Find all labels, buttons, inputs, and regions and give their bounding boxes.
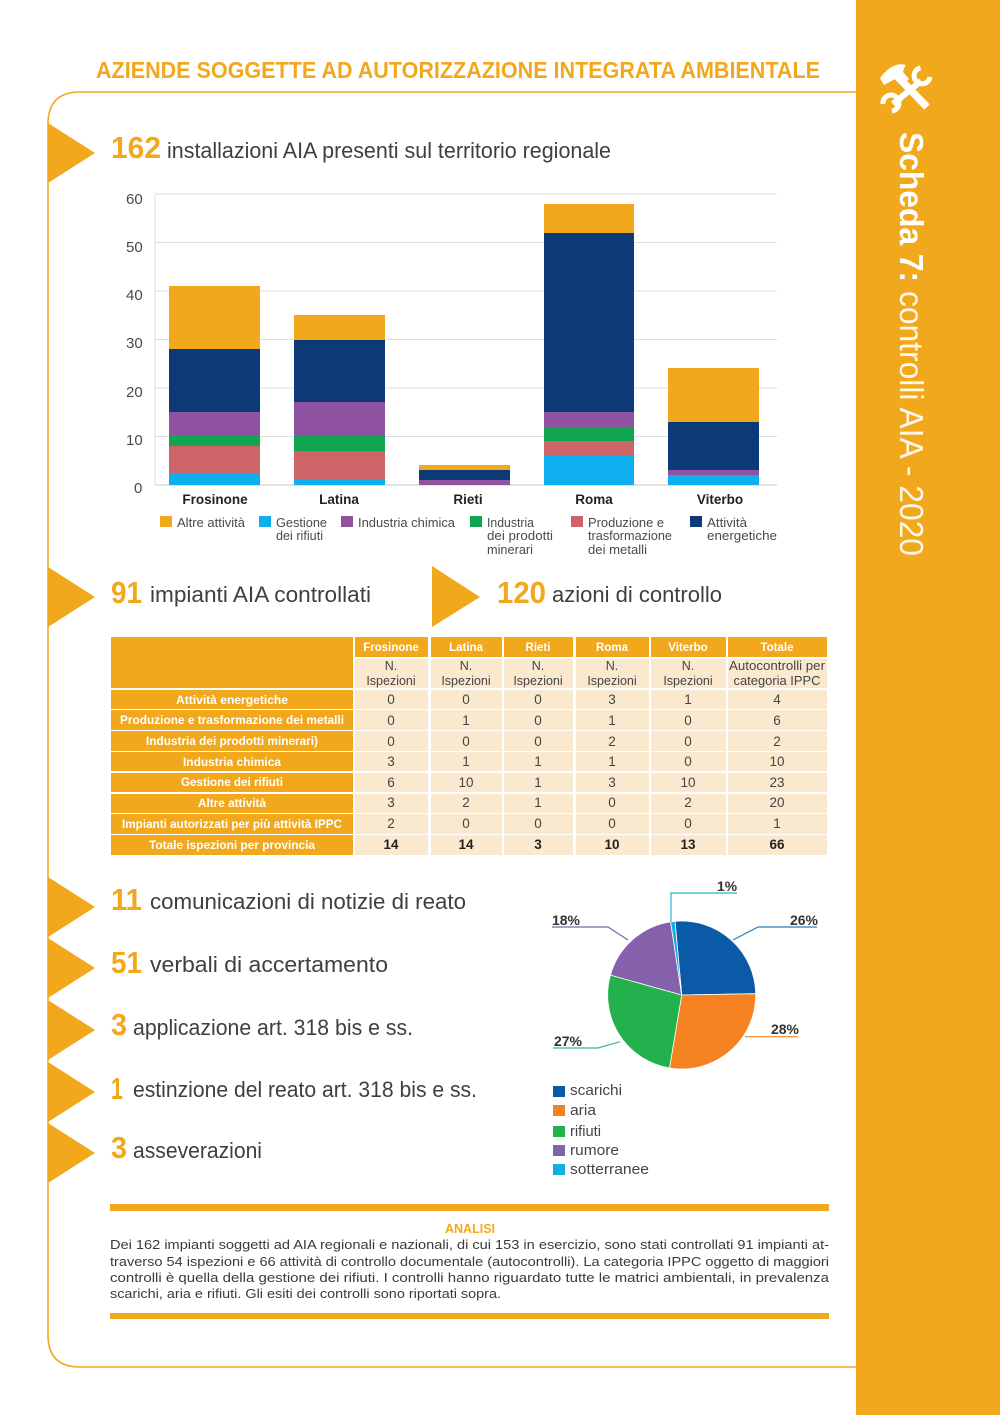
table header: N. — [606, 659, 618, 673]
stat: 1 estinzione — [48, 1062, 477, 1122]
table values: 10 — [458, 775, 474, 790]
stat: 162 installazioni: 162 — [111, 130, 161, 165]
table values: 0 — [534, 816, 542, 831]
stat: 11 comunicazioni: comunicazioni di notizie di reato — [150, 889, 466, 914]
table values: 6 — [387, 775, 395, 790]
table values: 0 — [534, 713, 542, 728]
table values: 0 — [684, 816, 692, 831]
stacked bar chart — [126, 191, 777, 507]
pie legend: rifiuti — [570, 1123, 601, 1140]
chart legend: trasformazione — [588, 529, 672, 543]
table values: 0 — [462, 734, 470, 749]
table values: 0 — [684, 754, 692, 769]
table row labels: Industria chimica — [183, 757, 282, 769]
bar: Roma — [544, 204, 634, 485]
table row labels: Attività energetiche — [176, 695, 288, 707]
chart legend: Gestione — [276, 516, 327, 530]
stat: 11 comunicazioni — [48, 877, 466, 937]
stat: 120 azioni: 120 — [497, 575, 546, 610]
table values: 0 — [684, 734, 692, 749]
stat: 51 verbali: 51 — [111, 945, 142, 980]
analysis text: traverso 54 ispezioni e 66 attività di controllo documentale (autocontrolli). La categoria IPPC oggetto di maggiori — [110, 1254, 829, 1269]
pie percentages: 26% — [790, 912, 819, 928]
table values: 0 — [534, 734, 542, 749]
stat: 1 estinzione: estinzione del reato art. 318 bis e ss. — [133, 1077, 477, 1102]
table row labels — [120, 695, 344, 852]
table header: categoria IPPC — [734, 674, 820, 688]
table values: 0 — [608, 816, 616, 831]
table header: Viterbo — [668, 642, 708, 654]
table values: 1 — [462, 754, 470, 769]
pie percentages: 1% — [717, 878, 738, 894]
pie percentages: 18% — [552, 912, 581, 928]
table header: Ispezioni — [587, 674, 637, 688]
table values: 3 — [387, 795, 395, 810]
table header: Latina — [449, 642, 484, 654]
pie percentages: 28% — [771, 1021, 800, 1037]
x axis labels: Viterbo — [697, 492, 743, 507]
inspections table — [111, 637, 827, 855]
table values: 4 — [773, 692, 781, 707]
table header: Ispezioni — [441, 674, 491, 688]
bar: Viterbo — [668, 368, 759, 485]
table values: 10 — [680, 775, 696, 790]
analysis text: scarichi, aria e rifiuti. Gli esiti dei controlli sono riportati sopra. — [110, 1286, 501, 1301]
y axis labels: 0 — [134, 480, 142, 497]
table header: Rieti — [526, 642, 550, 654]
pie percentages: 27% — [554, 1033, 583, 1049]
pie percentages — [552, 878, 819, 1049]
stat: 162 installazioni: installazioni AIA presenti sul territorio regionale — [167, 138, 611, 163]
x axis labels: Roma — [575, 492, 613, 507]
table values: 0 — [608, 795, 616, 810]
y axis labels: 20 — [126, 384, 143, 401]
y axis labels: 50 — [126, 239, 143, 256]
x axis labels: Rieti — [453, 492, 483, 507]
chart legend: Industria — [487, 516, 534, 530]
table values: 2 — [684, 795, 692, 810]
stat: 51 verbali: verbali di accertamento — [150, 952, 388, 977]
table header: N. — [460, 659, 472, 673]
chart legend: dei metalli — [588, 543, 647, 557]
table values: 1 — [608, 713, 616, 728]
table row labels: Totale ispezioni per provincia — [149, 840, 316, 852]
stat: 91 impianti: 91 — [111, 575, 142, 610]
icon: hammer and wrench — [880, 64, 930, 111]
table values: 1 — [534, 775, 542, 790]
table values: 10 — [769, 754, 785, 769]
table header: Roma — [596, 642, 629, 654]
table row labels: Produzione e trasformazione dei metalli — [120, 715, 344, 727]
stat: 51 verbali — [48, 938, 388, 998]
y axis labels: 30 — [126, 335, 143, 352]
y axis labels: 10 — [126, 432, 143, 449]
table values: 1 — [608, 754, 616, 769]
table values: 3 — [608, 775, 616, 790]
title: AZIENDE SOGGETTE AD AUTORIZZAZIONE INTEGRATA AMBIENTALE — [96, 57, 820, 83]
stat: 3 applicazione: 3 — [111, 1007, 127, 1042]
table values: 0 — [534, 692, 542, 707]
table values: 2 — [773, 734, 781, 749]
table header: Autocontrolli per — [729, 659, 825, 673]
stat: 120 azioni: azioni di controllo — [552, 582, 722, 607]
table values: 66 — [769, 837, 785, 852]
bar: Rieti — [419, 465, 510, 485]
stat: 1 estinzione: 1 — [111, 1071, 123, 1106]
table header: Ispezioni — [366, 674, 416, 688]
chart legend — [160, 516, 777, 557]
chart legend: dei prodotti — [487, 529, 553, 543]
table values: 0 — [462, 816, 470, 831]
table values: 3 — [608, 692, 616, 707]
analysis text: Dei 162 impianti soggetti ad AIA regionali e nazionali, di cui 153 in esercizio, sono stati controllati 91 impianti at- — [110, 1237, 829, 1252]
table header: N. — [682, 659, 694, 673]
sidebar — [856, 0, 1000, 1415]
chart legend: Altre attività — [177, 516, 245, 530]
table values: 1 — [462, 713, 470, 728]
table row labels: Impianti autorizzati per più attività IPPC — [122, 819, 342, 831]
x axis labels: Latina — [319, 492, 359, 507]
table values: 0 — [387, 734, 395, 749]
stat: 3 asseverazioni: 3 — [111, 1130, 127, 1165]
stat: 3 asseverazioni: asseverazioni — [133, 1138, 262, 1163]
table values: 0 — [387, 692, 395, 707]
table values: 13 — [680, 837, 696, 852]
table header: Frosinone — [363, 642, 419, 654]
table header: N. — [385, 659, 397, 673]
x axis labels — [182, 492, 743, 507]
table values: 2 — [608, 734, 616, 749]
stat: 91 impianti: impianti AIA controllati — [150, 582, 371, 607]
table values: 2 — [462, 795, 470, 810]
table row labels: Gestione dei rifiuti — [181, 777, 283, 789]
table header: Ispezioni — [513, 674, 563, 688]
chart legend: Industria chimica — [358, 516, 455, 530]
table values: 3 — [387, 754, 395, 769]
stat: 120 azioni — [432, 566, 722, 627]
chart legend: minerari — [487, 543, 533, 557]
stat: 3 applicazione — [48, 1000, 413, 1060]
table row labels: Altre attività — [198, 798, 267, 810]
pie legend: sotterranee — [570, 1161, 649, 1178]
pie legend: rumore — [570, 1142, 619, 1159]
chart legend: Attività — [707, 516, 747, 530]
x axis labels: Frosinone — [182, 492, 248, 507]
table values — [383, 692, 785, 852]
page frame — [48, 92, 856, 1367]
table header — [363, 642, 825, 688]
y axis labels: 60 — [126, 191, 143, 208]
analysis panel — [110, 1204, 830, 1319]
stat: 11 comunicazioni: 11 — [111, 882, 142, 917]
pie legend: aria — [570, 1102, 597, 1119]
table values: 20 — [769, 795, 785, 810]
sidebar title: Scheda 7: controlli AIA - 2020 — [893, 132, 930, 556]
table header: Totale — [760, 642, 794, 654]
table values: 1 — [684, 692, 692, 707]
analysis text: controlli è quella della gestione dei rifiuti. I controlli hanno riguardato tutte le matrici ambientali, in prevalenza — [110, 1270, 830, 1285]
table row labels: Industria dei prodotti minerari) — [146, 736, 318, 748]
table header: Ispezioni — [663, 674, 713, 688]
stat: 91 impianti — [48, 567, 371, 627]
bar: Frosinone — [169, 286, 260, 485]
table values: 1 — [534, 795, 542, 810]
stat: 162 installazioni — [48, 123, 611, 183]
chart legend: dei rifiuti — [276, 529, 323, 543]
bar: Latina — [294, 315, 385, 485]
table values: 23 — [769, 775, 785, 790]
table values: 14 — [383, 837, 399, 852]
table values: 3 — [534, 837, 542, 852]
y axis labels — [126, 191, 143, 497]
table values: 0 — [387, 713, 395, 728]
table values: 0 — [462, 692, 470, 707]
table header: N. — [532, 659, 544, 673]
table values: 1 — [534, 754, 542, 769]
analysis text — [110, 1237, 830, 1301]
stat: 3 asseverazioni — [48, 1123, 262, 1183]
y axis labels: 40 — [126, 287, 143, 304]
pie legend: scarichi — [570, 1082, 622, 1099]
pie chart — [552, 878, 819, 1069]
pie legend — [553, 1082, 649, 1178]
chart legend: energetiche — [707, 529, 777, 543]
table values: 0 — [684, 713, 692, 728]
pie leader lines — [552, 893, 817, 1048]
table values: 6 — [773, 713, 781, 728]
table values: 1 — [773, 816, 781, 831]
table values: 10 — [604, 837, 620, 852]
table values: 2 — [387, 816, 395, 831]
stat: 3 applicazione: applicazione art. 318 bis e ss. — [133, 1015, 413, 1040]
table values: 14 — [458, 837, 474, 852]
analysis heading: ANALISI — [445, 1222, 495, 1236]
chart legend: Produzione e — [588, 516, 664, 530]
